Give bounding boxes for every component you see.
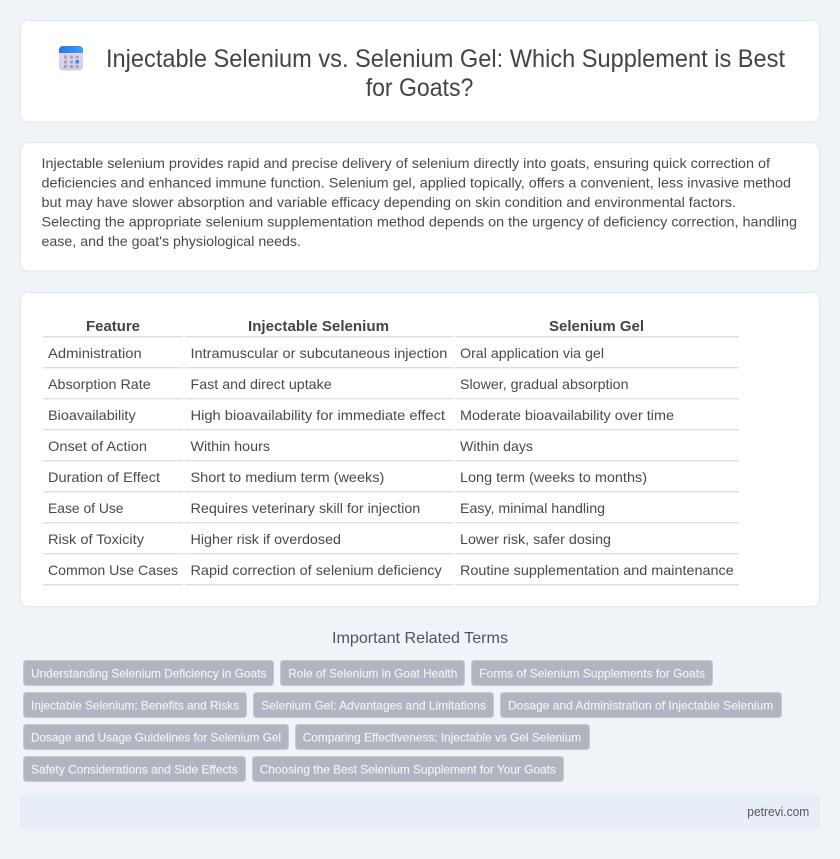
table header row: Selenium Gel: [549, 318, 644, 335]
text block: description: Injectable selenium provides rapid and precise delivery of selenium directly into goats, ensuring quick correction of: [42, 155, 770, 171]
text block: description: ease, and the goat's physiological needs.: [42, 233, 301, 249]
table row: administration: [48, 345, 604, 361]
title: for Goats?: [366, 74, 473, 102]
table header row: Feature: [86, 318, 140, 335]
chip: Safety Considerations and Side Effects: [31, 762, 238, 776]
table row: duration of effect: Duration of Effect: [48, 469, 160, 485]
table row: ease of use: [48, 500, 605, 516]
chip: Choosing the Best Selenium Supplement for Your Goats: [260, 762, 556, 776]
chip: Role of Selenium in Goat Health: [288, 666, 457, 680]
chip: [280, 660, 464, 686]
table row: common use cases: [48, 562, 734, 578]
table row: duration of effect: Long term (weeks to months): [460, 469, 647, 485]
chip: Dosage and Usage Guidelines for Selenium Gel: [31, 730, 281, 744]
chip: [24, 724, 288, 750]
chip: Comparing Effectiveness: Injectable vs Gel Selenium: [303, 730, 581, 744]
panel: related term chips: [24, 660, 782, 782]
chip: [24, 692, 246, 718]
table row: bioavailability: Bioavailability: [48, 407, 136, 423]
table row: absorption rate: Slower, gradual absorption: [460, 376, 628, 392]
footer: [20, 795, 820, 829]
chip: [252, 756, 564, 782]
table header row: [86, 318, 644, 335]
table header row: Injectable Selenium: [248, 318, 389, 335]
table row: duration of effect: Short to medium term (weeks): [190, 469, 384, 485]
table row: administration: Intramuscular or subcutaneous injection: [190, 345, 447, 361]
table row: risk of toxicity: Risk of Toxicity: [48, 531, 144, 547]
table row: risk of toxicity: Higher risk if overdosed: [190, 531, 341, 547]
chip: Understanding Selenium Deficiency in Goats: [31, 666, 266, 680]
icon: calendar: [59, 46, 83, 70]
table row: administration: Administration: [48, 345, 142, 361]
text block: description: [42, 155, 797, 249]
chip: Selenium Gel: Advantages and Limitations: [261, 698, 486, 712]
chip: [24, 660, 274, 686]
table row: bioavailability: Moderate bioavailability over time: [460, 407, 674, 423]
footer: petrevi.com: [747, 804, 809, 819]
table row: bioavailability: High bioavailability for immediate effect: [190, 407, 445, 423]
chip: Dosage and Administration of Injectable Selenium: [508, 698, 773, 712]
chip: [472, 660, 712, 686]
table row: ease of use: Easy, minimal handling: [460, 500, 605, 516]
chip: [500, 692, 782, 718]
text block: description: deficiencies and enhanced immune function. Selenium gel, applied topically, offers a convenient, less invasive method: [42, 174, 791, 190]
table row: common use cases: Rapid correction of selenium deficiency: [190, 562, 442, 578]
panel: description: [20, 142, 820, 271]
panel: title card: [20, 20, 820, 122]
title: [106, 45, 785, 102]
table row: risk of toxicity: [48, 531, 611, 547]
table row: onset of action: Within days: [460, 438, 533, 454]
panel: comparison table: [20, 292, 820, 606]
title: Injectable Selenium vs. Selenium Gel: Which Supplement is Best: [106, 45, 785, 73]
table row: ease of use: Requires veterinary skill for injection: [190, 500, 420, 516]
table row: common use cases: Common Use Cases: [48, 562, 178, 578]
table row: risk of toxicity: Lower risk, safer dosing: [460, 531, 611, 547]
text block: description: but may have slower absorption and variable efficacy depending on skin condition and environmental factors.: [42, 194, 736, 210]
table row: common use cases: Routine supplementation and maintenance: [460, 562, 734, 578]
table row: duration of effect: [48, 469, 647, 485]
text block: description: Selecting the appropriate selenium supplementation method depends on the urgency of deficiency correction, handling: [42, 214, 797, 230]
table row: ease of use: Ease of Use: [48, 500, 124, 516]
chip: [254, 692, 494, 718]
heading: important related terms: Important Related Terms: [332, 630, 508, 647]
table row: administration: Oral application via gel: [460, 345, 604, 361]
table row: absorption rate: Fast and direct uptake: [190, 376, 332, 392]
table row: bioavailability: [48, 407, 674, 423]
table row: onset of action: Within hours: [190, 438, 270, 454]
chip: [296, 724, 590, 750]
chip: Injectable Selenium: Benefits and Risks: [31, 698, 239, 712]
chip: Forms of Selenium Supplements for Goats: [479, 666, 705, 680]
table row: onset of action: Onset of Action: [48, 438, 147, 454]
table row: absorption rate: Absorption Rate: [48, 376, 151, 392]
table row: absorption rate: [48, 376, 628, 392]
table row: onset of action: [48, 438, 533, 454]
chip: [24, 756, 246, 782]
